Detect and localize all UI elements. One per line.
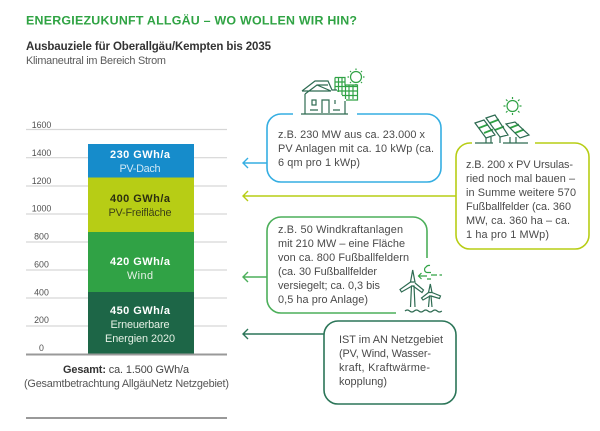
bar segment: Erneuerbare Energien 2020: Erneuerbare <box>110 319 170 331</box>
panel: PV-Freifläche: Fußballfelder (ca. 360 <box>466 201 571 213</box>
total caption: (Gesamtbetrachtung AllgäuNetz Netzgebiet) <box>24 378 229 390</box>
bar segment: PV-Dach: 230 GWh/a <box>110 149 171 161</box>
icon: ground-mounted solar panels <box>475 97 529 143</box>
panel: PV-Dach <box>267 114 441 182</box>
panel: IST: IST im AN Netzgebiet <box>339 334 443 346</box>
panel: PV-Freifläche: ried noch mal bauen – <box>466 173 576 185</box>
panel: PV-Dach: PV Anlagen mit ca. 10 kWp (ca. <box>278 143 434 155</box>
panel: Wind: von ca. 800 Fußballfeldern <box>278 252 409 264</box>
bar segment: Erneuerbare Energien 2020: 450 GWh/a <box>110 305 171 317</box>
bar segment: Erneuerbare Energien 2020 <box>88 292 194 354</box>
subtitle description: Klimaneutral im Bereich Strom <box>26 55 166 67</box>
title: ENERGIEZUKUNFT ALLGÄU – WO WOLLEN WIR HIN? <box>26 12 357 28</box>
bar segment: Wind: Wind <box>127 270 153 282</box>
panel: IST <box>324 321 456 404</box>
arrow: Wind <box>243 272 267 282</box>
panel: PV-Freifläche: MW, ca. 360 ha – ca. <box>466 215 570 227</box>
axis labels: 800 <box>34 232 49 242</box>
axis labels: 1200 <box>32 176 51 186</box>
axis labels: 400 <box>34 288 49 298</box>
bar segment: PV-Dach: PV-Dach <box>120 163 160 175</box>
subtitle heading: Ausbauziele für Oberallgäu/Kempten bis 2035 <box>26 41 272 53</box>
bar segment: PV-Freifläche <box>88 178 194 232</box>
panel: Wind: (ca. 30 Fußballfelder <box>278 266 377 278</box>
arrow: IST <box>243 329 324 339</box>
bar segment: PV-Freifläche: 400 GWh/a <box>110 193 171 205</box>
axis labels <box>32 120 51 353</box>
panel: PV-Dach: 6 qm pro 1 kWp) <box>278 157 360 169</box>
bar segment: PV-Dach <box>88 144 194 178</box>
panel: PV-Freifläche: 1 ha pro 1 MWp) <box>466 229 549 241</box>
panel: PV-Dach: z.B. 230 MW aus ca. 23.000 x <box>278 129 426 141</box>
axis labels: 200 <box>34 315 49 325</box>
arrow: PV-Freifläche <box>243 191 456 201</box>
total caption: Gesamt: ca. 1.500 GWh/a <box>63 364 190 376</box>
icon: wind turbines <box>400 265 442 312</box>
panel: Wind: versiegelt; ca. 0,3 bis <box>278 280 381 292</box>
panel: PV-Freifläche <box>456 143 589 249</box>
axis labels: 600 <box>34 260 49 270</box>
icon: house with solar roof <box>301 68 364 114</box>
bar segment: Erneuerbare Energien 2020: Energien 2020 <box>105 333 175 345</box>
panel: IST: kraft, Kraftwärme- <box>339 362 430 374</box>
panel: IST: (PV, Wind, Wasser- <box>339 348 431 360</box>
axis labels: 1600 <box>32 120 51 130</box>
panel: Wind <box>267 217 427 313</box>
axis labels: 0 <box>39 343 44 353</box>
stacked bar chart <box>26 120 227 354</box>
axis labels: 1400 <box>32 148 51 158</box>
bar segment: Wind <box>88 232 194 292</box>
bottom rule <box>26 417 227 419</box>
panel: PV-Freifläche: in Summe weitere 570 <box>466 187 576 199</box>
bar segment: PV-Freifläche: PV-Freifläche <box>108 207 172 219</box>
bar segment: Wind: 420 GWh/a <box>110 256 171 268</box>
panel: Wind: z.B. 50 Windkraftanlagen <box>278 224 403 236</box>
panel: Wind: mit 210 MW – eine Fläche <box>278 238 405 250</box>
panel: PV-Freifläche: z.B. 200 x PV Ursulas- <box>466 159 573 171</box>
total caption <box>24 364 229 390</box>
arrow: PV-Dach <box>243 158 267 168</box>
panel: Wind: 0,5 ha pro Anlage) <box>278 294 368 306</box>
axis labels: 1000 <box>32 204 51 214</box>
panel: IST: kopplung) <box>339 376 387 388</box>
